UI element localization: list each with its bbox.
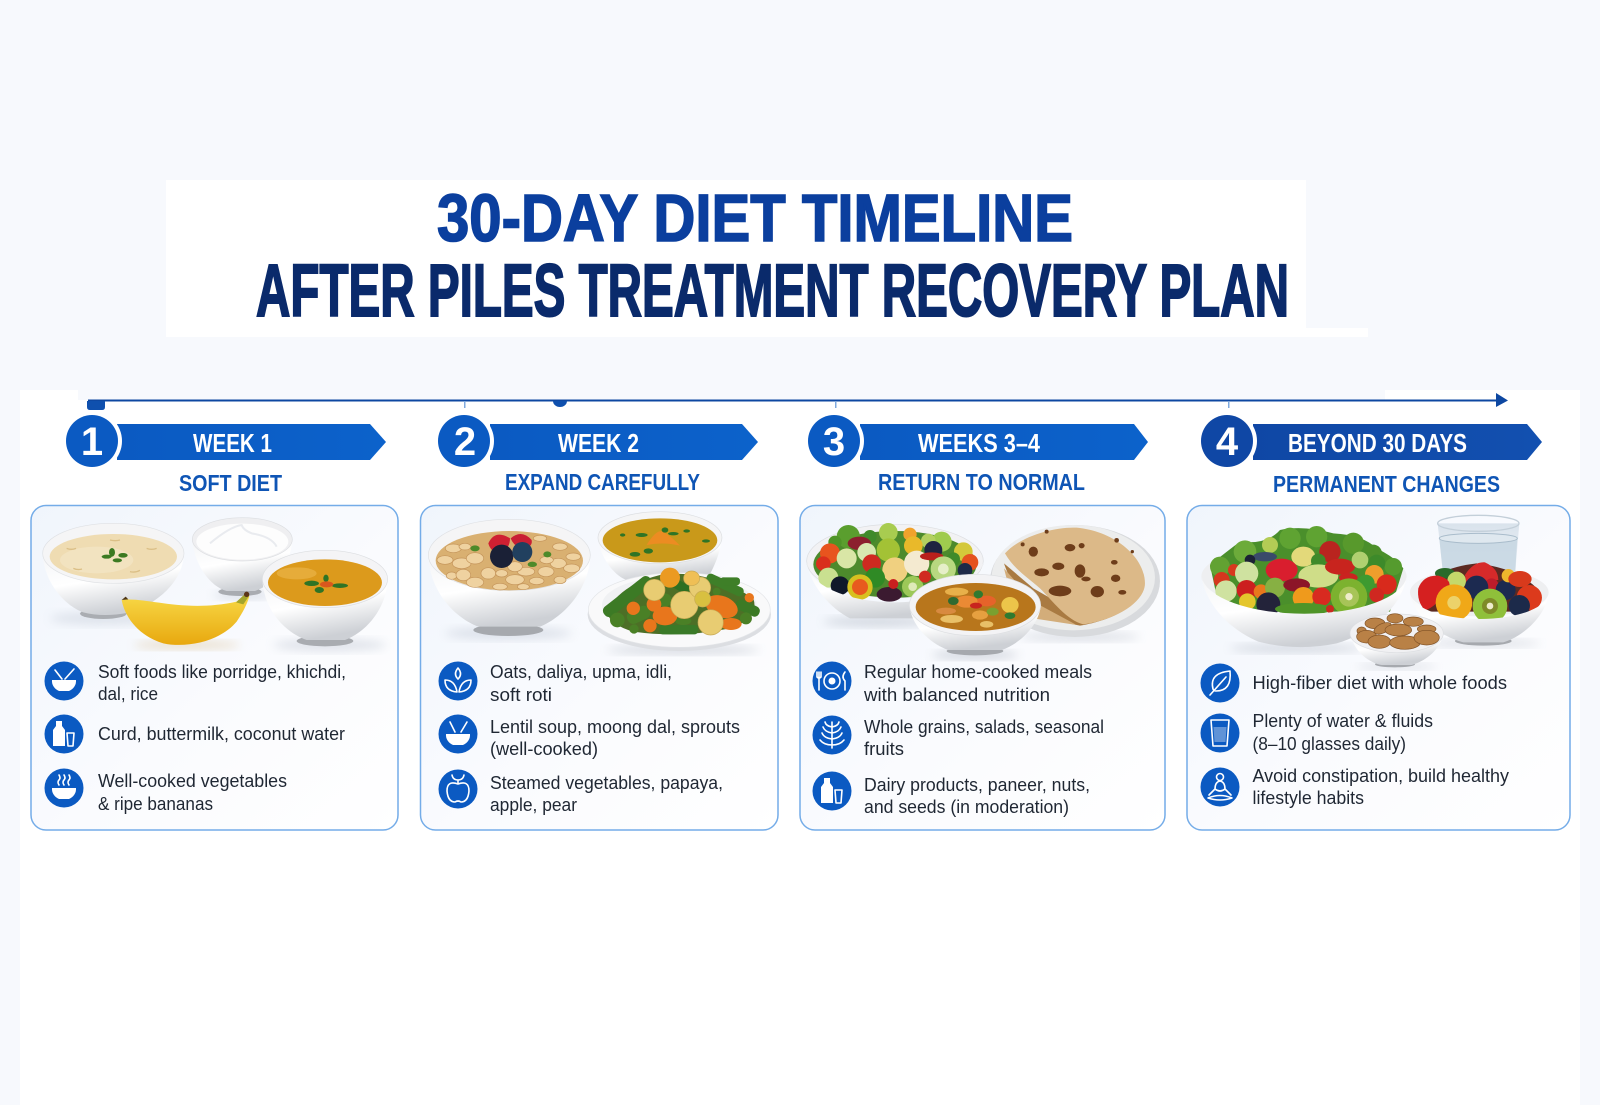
- food photo: salad, water glass, fruit, nuts: [1201, 515, 1549, 669]
- item: lentil soup: (well-cooked): [490, 739, 598, 759]
- item: lifestyle: lifestyle habits: [1252, 788, 1364, 808]
- item: dairy: and seeds (in moderation): [864, 797, 1069, 817]
- week 1 header ribbon: WEEK 1: [193, 428, 272, 458]
- icon: milk bottle and glass: [812, 772, 852, 810]
- item: whole grains: Whole grains, salads, seasonal: [864, 717, 1104, 737]
- item: curd: [44, 714, 345, 754]
- card: week 1: [31, 506, 398, 830]
- panel: week 2: [420, 411, 778, 830]
- icon: leaf: [1200, 664, 1240, 702]
- item: high-fiber: [1200, 664, 1507, 702]
- heading: soft diet: SOFT DIET: [179, 470, 282, 496]
- icon: wheat: [812, 716, 852, 754]
- icon: steaming bowl: [44, 768, 84, 808]
- item: whole grains: [812, 716, 1104, 759]
- item: home-cooked meals: [812, 662, 1092, 705]
- food photo: porridge, curd, banana, dal: [43, 518, 388, 651]
- weeks 3-4 header ribbon: 3: [823, 420, 845, 464]
- item: lentil soup: [438, 714, 740, 759]
- white content area: [20, 390, 1580, 1105]
- item: water: Plenty of water & fluids: [1252, 711, 1433, 731]
- heading: permanent changes: PERMANENT CHANGES: [1273, 471, 1500, 497]
- week 2 header ribbon: [434, 411, 758, 471]
- card: weeks 3-4: [800, 506, 1165, 830]
- icon: plate and cutlery: [812, 662, 852, 700]
- item: water: [1200, 711, 1433, 754]
- item: curd: Curd, buttermilk, coconut water: [98, 724, 345, 744]
- item: steamed vegetables: [438, 770, 723, 815]
- title: [166, 180, 1368, 337]
- item: oats: soft roti: [490, 685, 552, 705]
- icon: soup bowl with spoons: [438, 714, 478, 754]
- item: vegetables: [44, 768, 287, 814]
- item: lentil soup: Lentil soup, moong dal, sprouts: [490, 717, 740, 737]
- item: home-cooked meals: Regular home-cooked meals: [864, 662, 1092, 682]
- item: dairy: [812, 772, 1090, 817]
- card: beyond 30 days: [1187, 506, 1570, 830]
- icon: leaves and drop: [438, 662, 478, 700]
- heading: expand carefully: EXPAND CAREFULLY: [505, 469, 700, 495]
- item: dairy: Dairy products, paneer, nuts,: [864, 775, 1090, 795]
- item: whole grains: fruits: [864, 739, 904, 759]
- item: soft foods: dal, rice: [98, 684, 158, 704]
- weeks 3-4 header ribbon: [804, 411, 1148, 471]
- item: steamed vegetables: Steamed vegetables, papaya,: [490, 773, 723, 793]
- beyond 30 days header ribbon: BEYOND 30 DAYS: [1288, 428, 1467, 458]
- item: oats: [438, 662, 672, 705]
- week 1 header ribbon: 1: [81, 420, 103, 464]
- title: 30-DAY DIET TIMELINE: [437, 181, 1073, 256]
- beyond 30 days header ribbon: 4: [1216, 420, 1239, 464]
- item: steamed vegetables: apple, pear: [490, 795, 577, 815]
- heading: return to normal: RETURN TO NORMAL: [878, 469, 1085, 495]
- panel: beyond 30 days: [1187, 411, 1570, 830]
- icon: glass of water: [1200, 714, 1240, 752]
- icon: meditating figure: [1200, 768, 1240, 806]
- item: vegetables: Well-cooked vegetables: [98, 771, 287, 791]
- item: soft foods: [44, 662, 346, 704]
- food photo: salad, roti, soup: [807, 523, 1160, 659]
- icon: apple: [438, 770, 478, 808]
- timeline arrow: [87, 393, 1508, 410]
- weeks 3-4 header ribbon: WEEKS 3–4: [918, 428, 1040, 458]
- beyond 30 days header ribbon: [1197, 411, 1542, 471]
- item: high-fiber: High-fiber diet with whole foods: [1252, 673, 1507, 693]
- item: oats: Oats, daliya, upma, idli,: [490, 662, 672, 682]
- week 1 header ribbon: [62, 411, 386, 471]
- icon: bowl with spoons: [44, 662, 84, 700]
- week 2 header ribbon: WEEK 2: [558, 428, 639, 458]
- item: soft foods: Soft foods like porridge, khichdi,: [98, 662, 346, 682]
- item: home-cooked meals: with balanced nutrition: [863, 685, 1050, 705]
- food photo: oats, soup, vegetables: [428, 512, 771, 654]
- item: water: (8–10 glasses daily): [1252, 734, 1406, 754]
- item: vegetables: & ripe bananas: [98, 794, 213, 814]
- icon: milk bottle and glass: [44, 714, 84, 754]
- card: week 2: [420, 506, 778, 830]
- panel: weeks 3-4: [800, 411, 1165, 830]
- item: lifestyle: Avoid constipation, build healthy: [1252, 766, 1509, 786]
- panel: week 1: [31, 411, 398, 830]
- item: lifestyle: [1200, 766, 1509, 808]
- week 2 header ribbon: 2: [454, 420, 476, 464]
